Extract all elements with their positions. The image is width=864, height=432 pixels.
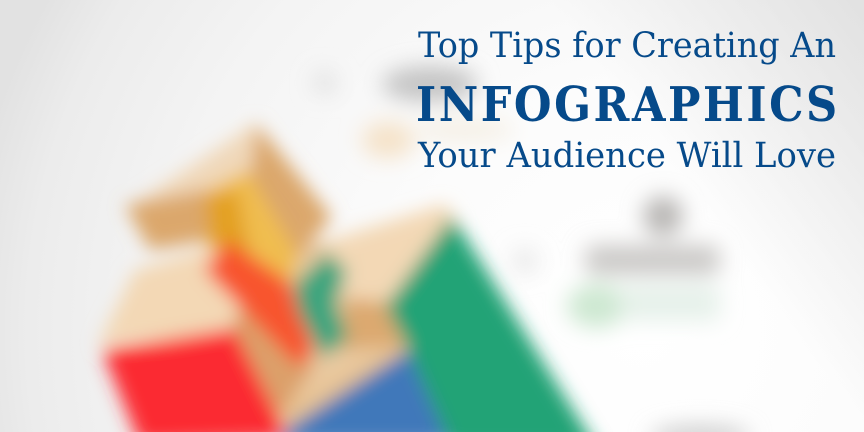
faint grey blurred shapes (313, 71, 337, 95)
title line 1: Top Tips for Creating An (418, 26, 836, 66)
base silhouette (232, 240, 405, 425)
title line 3: Your Audience Will Love (417, 136, 836, 176)
title line 2: INFOGRAPHICS (416, 76, 837, 133)
blurred infographic illustration (98, 122, 598, 432)
title (416, 26, 837, 176)
